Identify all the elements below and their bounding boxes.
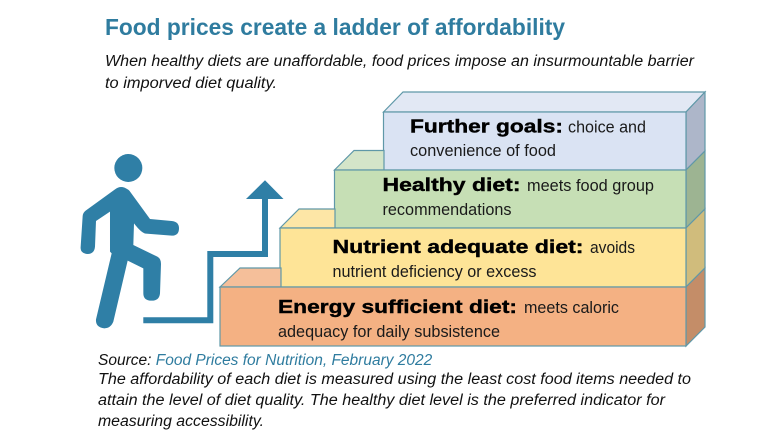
step: nutrient adequate diet: Nutrient adequate diet:	[332, 236, 584, 257]
footnote: attain the level of diet quality. The healthy diet level is the preferred indicator for	[98, 392, 666, 409]
step: energy sufficient diet: meets caloric	[524, 299, 619, 317]
subtitle: When healthy diets are unaffordable, food prices impose an insurmountable barrier	[105, 53, 695, 70]
title: Food prices create a ladder of affordability	[105, 14, 565, 40]
step: nutrient adequate diet: nutrient deficiency or excess	[332, 263, 536, 281]
footnote	[98, 371, 691, 430]
subtitle	[105, 53, 695, 92]
step: healthy diet: meets food group	[527, 177, 654, 195]
step: further goals: convenience of food	[410, 142, 556, 160]
step: healthy diet	[334, 150, 705, 228]
step: energy sufficient diet: adequacy for daily subsistence	[278, 323, 500, 341]
step: further goals: Further goals:	[410, 116, 563, 136]
step: further goals: choice and	[568, 118, 646, 136]
subtitle: to imporved diet quality.	[105, 75, 277, 92]
arrow: stair-step line going up	[143, 180, 284, 320]
source line: Source: Food Prices for Nutrition, February 2022	[98, 352, 433, 369]
step: further goals	[384, 92, 705, 170]
icon: person climbing stairs	[81, 154, 179, 328]
step: healthy diet: Healthy diet:	[382, 174, 520, 195]
footnote: measuring accessibility.	[98, 413, 264, 430]
step: energy sufficient diet	[220, 268, 705, 346]
footnote: The affordability of each diet is measured using the least cost food items needed to	[98, 371, 691, 388]
step: nutrient adequate diet	[280, 209, 705, 287]
step: energy sufficient diet: Energy sufficient diet:	[278, 296, 517, 317]
step: healthy diet: recommendations	[382, 201, 512, 219]
step: nutrient adequate diet: avoids	[590, 239, 635, 257]
